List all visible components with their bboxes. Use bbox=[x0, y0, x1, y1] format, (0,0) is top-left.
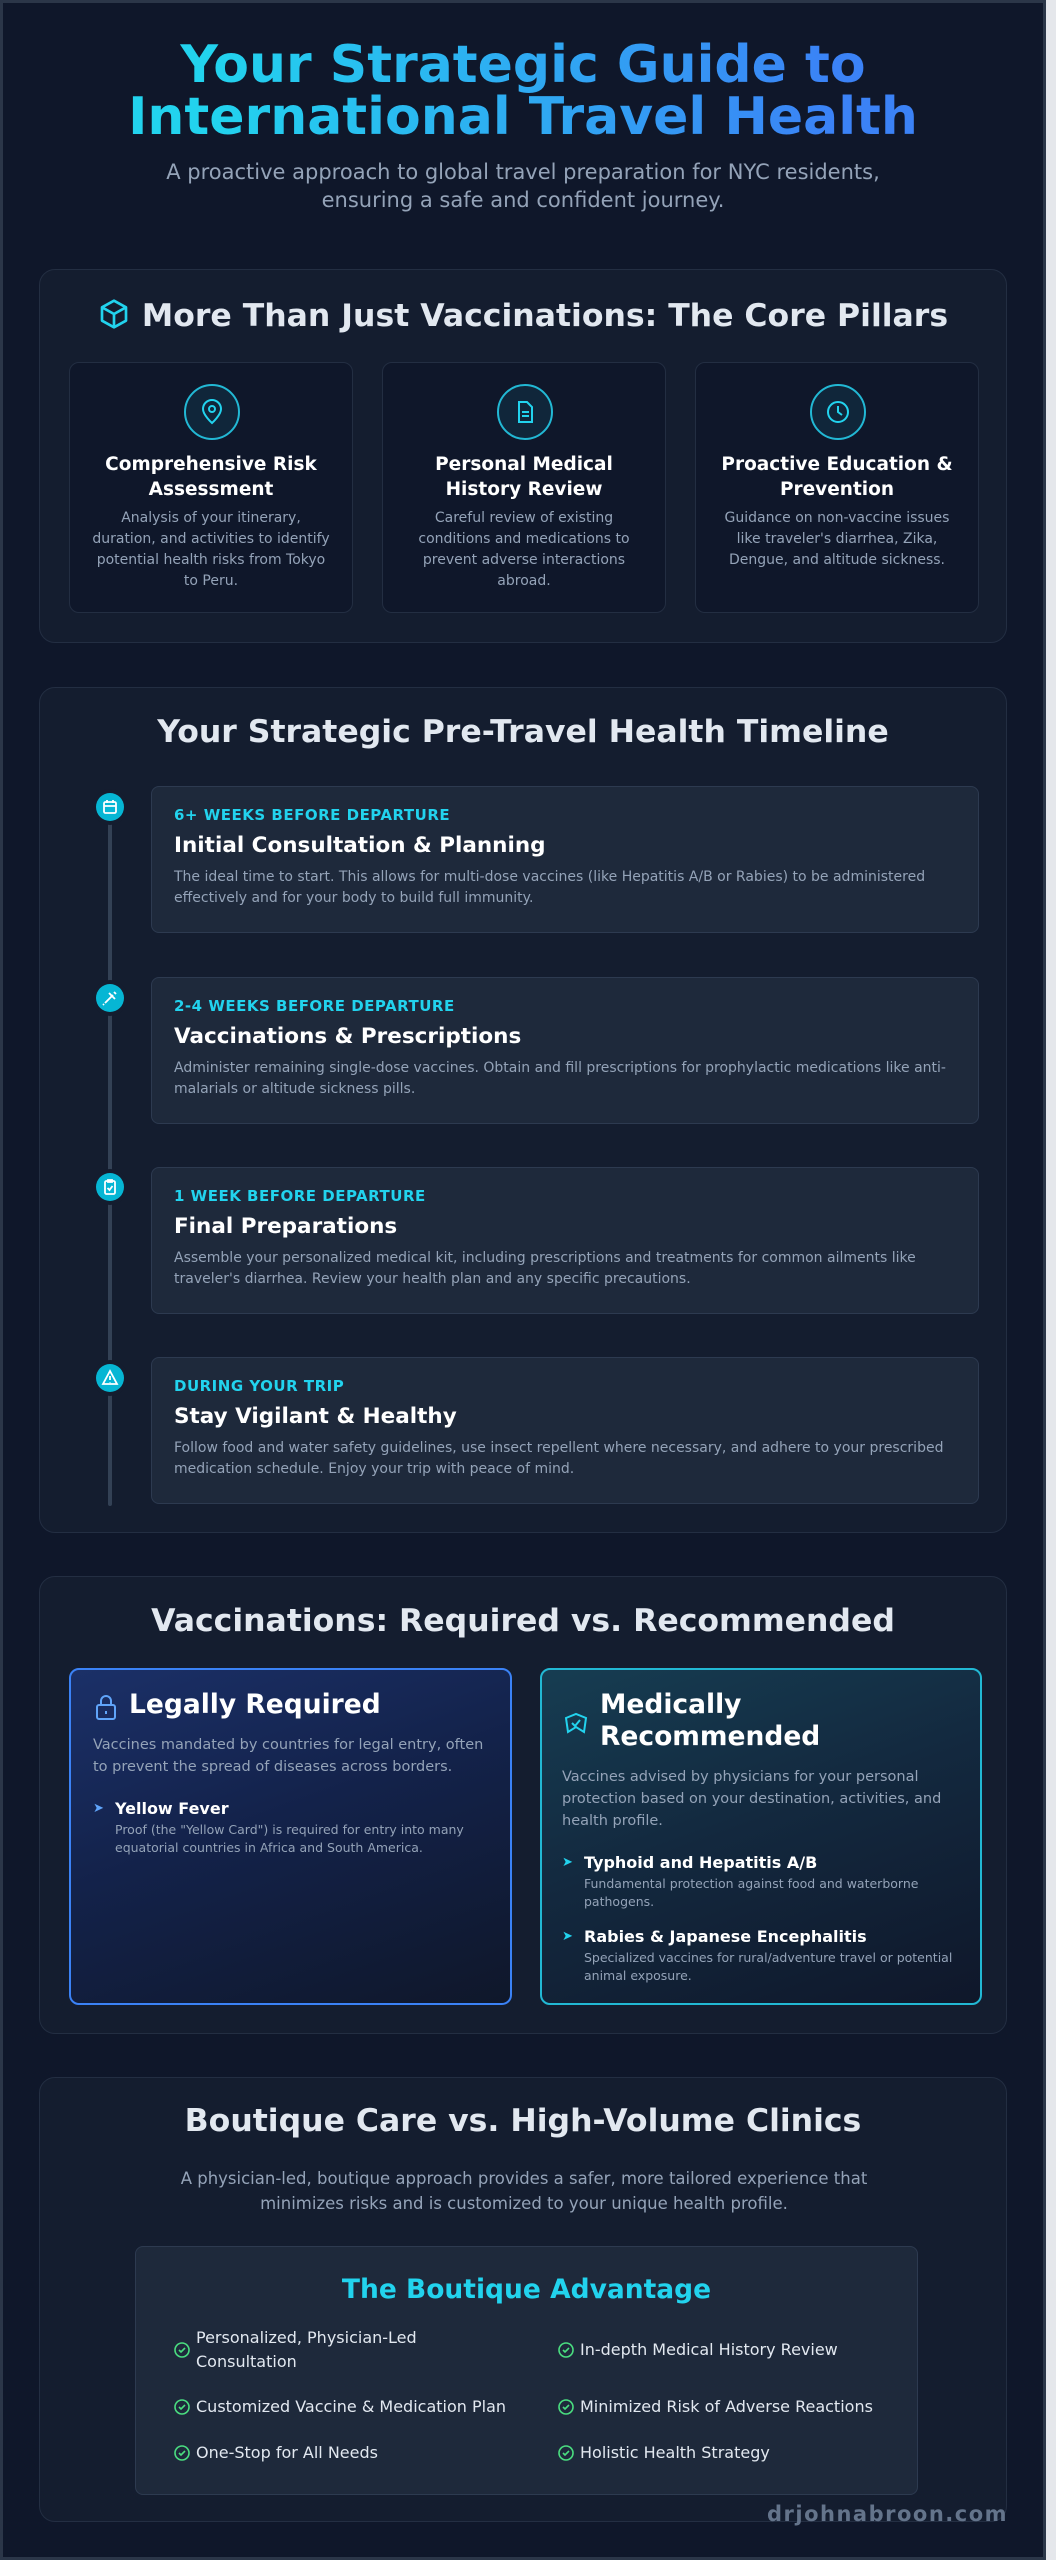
subtitle: boutique: A physician-led, boutique approach provides a safer, more tailored experience that minimizes risks and is customized to your unique health profile. bbox=[181, 2169, 867, 2213]
icon: warning dot bbox=[96, 1364, 124, 1392]
item: yellow fever bbox=[93, 1799, 464, 1855]
item: rabies: ➤ bbox=[562, 1929, 573, 1944]
step 4 bbox=[151, 1357, 979, 1504]
box: medically recommended bbox=[540, 1668, 982, 2005]
step 2 bbox=[151, 977, 979, 1124]
panel: boutique care bbox=[39, 2077, 1007, 2522]
item 5: One-Stop for All Needs bbox=[196, 2443, 378, 2462]
card: medical history: Careful review of existing conditions and medications to prevent adverse interactions abroad. bbox=[418, 510, 630, 589]
subtitle: A proactive approach to global travel preparation for NYC residents, bbox=[166, 160, 880, 184]
item: typhoid bbox=[562, 1853, 918, 1909]
box: legally required: Vaccines mandated by countries for legal entry, often to prevent the spread of diseases across borders. bbox=[93, 1737, 483, 1775]
icon: shield bbox=[564, 1712, 588, 1734]
step 1 bbox=[151, 786, 979, 933]
heading: vaccinations: Vaccinations: Required vs. Recommended bbox=[151, 1603, 895, 1639]
panel: vaccinations bbox=[39, 1576, 1007, 2034]
step 4: DURING YOUR TRIP bbox=[174, 1377, 344, 1395]
step 1: Initial Consultation & Planning bbox=[174, 833, 546, 858]
box: boutique advantage bbox=[135, 2246, 918, 2495]
step 2: Vaccinations & Prescriptions bbox=[174, 1024, 521, 1049]
item: yellow fever: Proof (the "Yellow Card") is required for entry into many equatorial countries in Africa and South America. bbox=[115, 1822, 464, 1855]
card: medical history: Personal Medical History Review bbox=[435, 454, 613, 500]
title: International Travel Health bbox=[128, 87, 918, 147]
card: risk assessment: Comprehensive Risk Assessment bbox=[105, 454, 317, 500]
step 2: 2-4 WEEKS BEFORE DEPARTURE bbox=[174, 997, 455, 1015]
step 4: Stay Vigilant & Healthy bbox=[174, 1404, 457, 1429]
item: typhoid: ➤ bbox=[562, 1855, 573, 1870]
icon: lock bbox=[96, 1695, 116, 1720]
title: legally required: Legally Required bbox=[129, 1689, 381, 1720]
subtitle: ensuring a safe and confident journey. bbox=[322, 188, 724, 212]
title: medically recommended bbox=[600, 1689, 820, 1752]
icon: clock bbox=[810, 384, 866, 440]
icon: clipboard dot bbox=[96, 1173, 124, 1201]
step 2: Administer remaining single-dose vaccines. Obtain and fill prescriptions for prophylactic medications like anti-malarials or altitude sickness pills. bbox=[174, 1060, 946, 1097]
heading: timeline: Your Strategic Pre-Travel Health Timeline bbox=[157, 714, 889, 750]
icon: map pin bbox=[184, 384, 240, 440]
item: yellow fever: ➤ bbox=[93, 1801, 104, 1816]
box: legally required bbox=[69, 1668, 512, 2005]
step 4: Follow food and water safety guidelines, use insect repellent where necessary, and adhere to your prescribed medication schedule. Enjoy your trip with peace of mind. bbox=[174, 1440, 943, 1477]
item 1: Personalized, Physician-Led Consultation bbox=[196, 2328, 417, 2371]
item: yellow fever: Yellow Fever bbox=[115, 1799, 229, 1818]
watermark: drjohnabroon.com bbox=[767, 2502, 1008, 2526]
panel: timeline bbox=[39, 687, 1007, 1533]
heading: core pillars: More Than Just Vaccinations: The Core Pillars bbox=[142, 298, 948, 334]
item 6: Holistic Health Strategy bbox=[580, 2443, 770, 2462]
panel: core pillars bbox=[39, 269, 1007, 643]
item 4: Minimized Risk of Adverse Reactions bbox=[580, 2397, 873, 2416]
item: typhoid: Typhoid and Hepatitis A/B bbox=[584, 1853, 817, 1872]
step 1: The ideal time to start. This allows for multi-dose vaccines (like Hepatitis A/B or Rabies) to be administered effectively and for your body to build full immunity. bbox=[174, 869, 925, 906]
title bbox=[3, 39, 1043, 143]
item 2: In-depth Medical History Review bbox=[580, 2340, 838, 2359]
box: medically recommended: Vaccines advised by physicians for your personal protection based on your destination, activities, and health profile. bbox=[562, 1769, 941, 1829]
card: medical history bbox=[382, 362, 666, 613]
heading: boutique: Boutique Care vs. High-Volume Clinics bbox=[185, 2103, 861, 2139]
item: rabies bbox=[562, 1927, 952, 1983]
step 3: Final Preparations bbox=[174, 1214, 397, 1239]
card: education: Guidance on non-vaccine issues like traveler's diarrhea, Zika, Dengue, and altitude sickness. bbox=[725, 510, 949, 568]
card: risk assessment bbox=[69, 362, 353, 613]
title: Your Strategic Guide to bbox=[180, 35, 866, 95]
item: rabies: Rabies & Japanese Encephalitis bbox=[584, 1927, 867, 1946]
icon: document bbox=[497, 384, 553, 440]
icon: syringe dot bbox=[96, 984, 124, 1012]
icon: calendar dot bbox=[96, 793, 124, 821]
title: medically recommended: Medically bbox=[600, 1689, 741, 1720]
step 3: Assemble your personalized medical kit, including prescriptions and treatments for common ailments like traveler's diarrhea. Review your health plan and any specific precautions. bbox=[174, 1250, 916, 1287]
step 3 bbox=[151, 1167, 979, 1314]
card: education bbox=[695, 362, 979, 613]
item: typhoid: Fundamental protection against food and waterborne pathogens. bbox=[584, 1876, 918, 1909]
item: rabies: Specialized vaccines for rural/adventure travel or potential animal exposure. bbox=[584, 1950, 952, 1983]
item 3: Customized Vaccine & Medication Plan bbox=[196, 2397, 506, 2416]
card: risk assessment: Analysis of your itinerary, duration, and activities to identify potential health risks from Tokyo to Peru. bbox=[92, 510, 330, 589]
card: education: Proactive Education & Prevention bbox=[721, 454, 953, 500]
heading: boutique advantage: The Boutique Advantage bbox=[342, 2274, 711, 2305]
title: medically recommended: Recommended bbox=[600, 1721, 820, 1752]
step 3: 1 WEEK BEFORE DEPARTURE bbox=[174, 1187, 426, 1205]
step 1: 6+ WEEKS BEFORE DEPARTURE bbox=[174, 806, 450, 824]
subtitle bbox=[166, 160, 880, 212]
